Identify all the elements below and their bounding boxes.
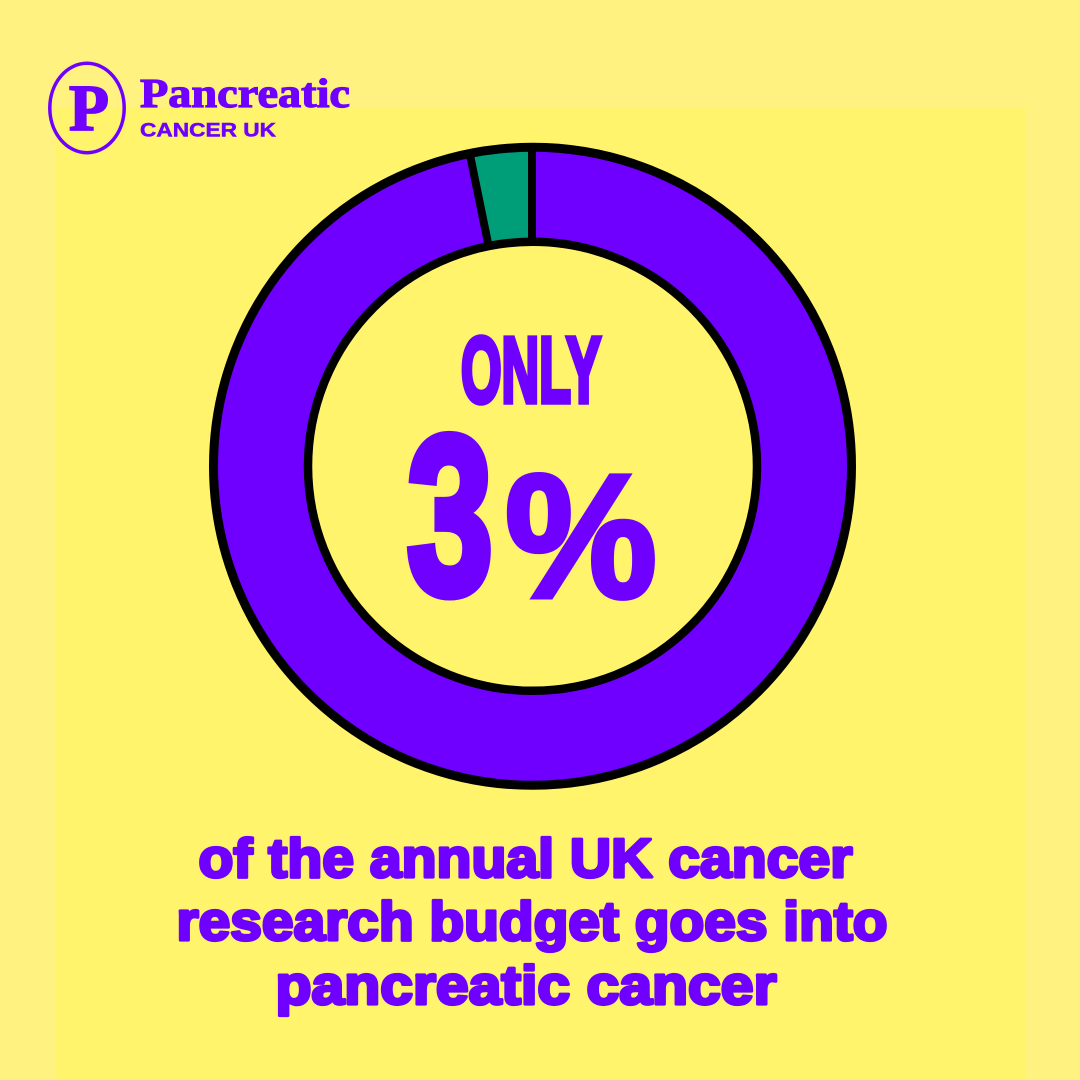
text: 3: 3 bbox=[407, 389, 493, 641]
text: 3% statistic bbox=[407, 389, 657, 641]
caption line 2: research budget goes into bbox=[176, 890, 888, 952]
donut chart: 3 percent share bbox=[214, 146, 852, 785]
logo wordmark: Cancer UK: CANCER UK bbox=[140, 120, 276, 142]
logo: Pancreatic Cancer UK bbox=[50, 63, 350, 153]
text: percent sign: % bbox=[505, 439, 657, 635]
donut outlines bbox=[214, 147, 852, 785]
caption line 3: pancreatic cancer bbox=[276, 954, 776, 1016]
icon: oval P emblem bbox=[50, 63, 124, 153]
donut segment: 3 percent pancreatic cancer bbox=[467, 146, 532, 244]
logo wordmark: Pancreatic: Pancreatic bbox=[140, 70, 350, 116]
text: ONLY: ONLY bbox=[461, 318, 601, 422]
donut segment: remaining 97 percent bbox=[214, 147, 852, 785]
caption line 1: of the annual UK cancer bbox=[198, 827, 852, 889]
caption: budget statement bbox=[176, 827, 888, 1016]
icon: oval P emblem: P bbox=[69, 72, 109, 145]
